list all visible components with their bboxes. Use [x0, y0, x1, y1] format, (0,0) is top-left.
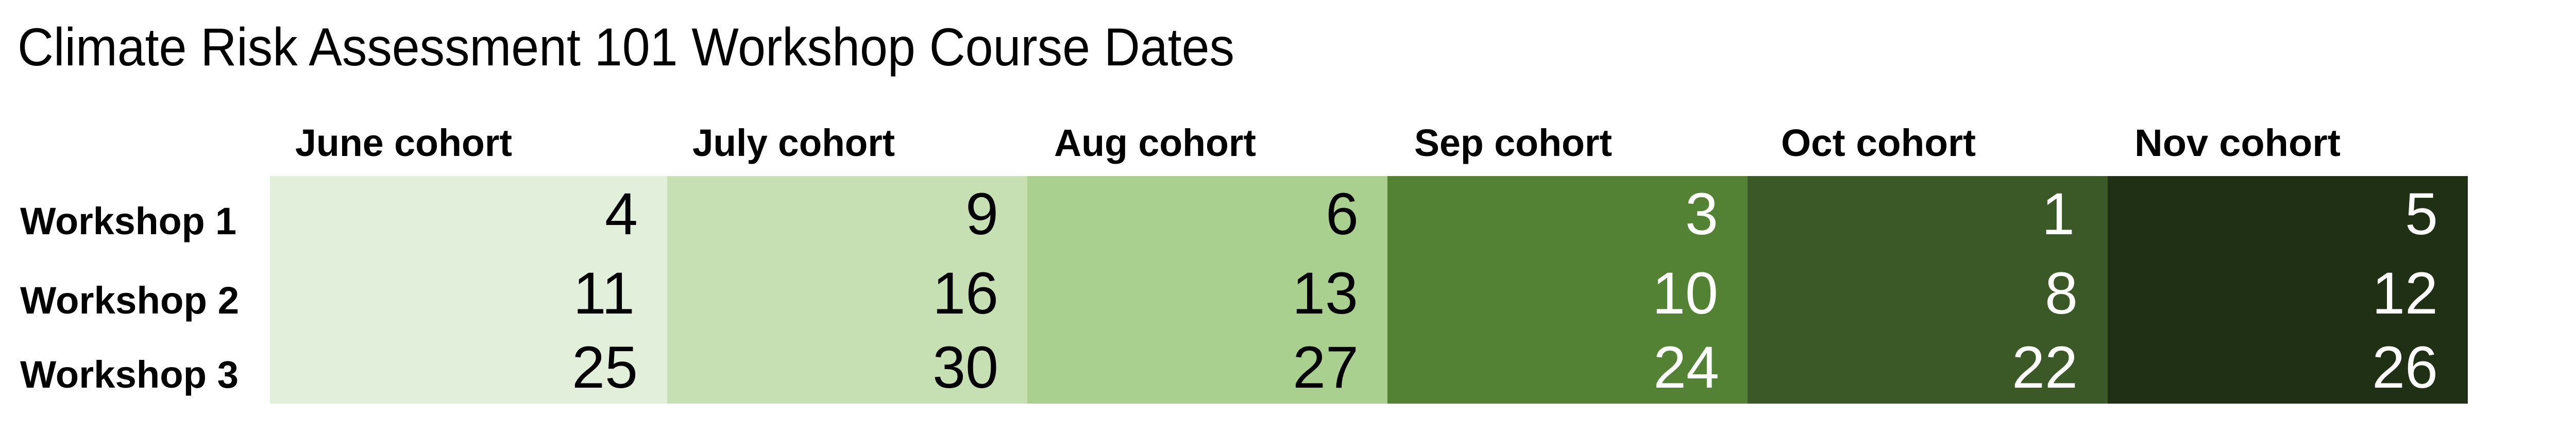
row headings: Workshop 3	[20, 353, 239, 396]
column: Nov cohort: 5	[2405, 181, 2438, 247]
column headings: Nov cohort	[2134, 121, 2341, 164]
column: Nov cohort: 26	[2372, 335, 2438, 401]
column: Sep cohort	[1387, 176, 1748, 404]
column: Oct cohort: 22	[2012, 335, 2078, 401]
column headings: Sep cohort	[1414, 121, 1612, 164]
column headings: June cohort	[295, 121, 512, 164]
column: June cohort: 11	[573, 261, 635, 326]
column: July cohort	[667, 176, 1027, 404]
column: Nov cohort	[2108, 176, 2468, 404]
column: Sep cohort: 10	[1652, 261, 1718, 326]
column: Oct cohort: 8	[2045, 261, 2078, 326]
column: Oct cohort: 1	[2042, 181, 2075, 247]
row headings: Workshop 2	[20, 279, 239, 322]
column: July cohort: 16	[933, 261, 998, 326]
column: Nov cohort: 12	[2372, 261, 2438, 326]
column: Aug cohort: 27	[1293, 335, 1359, 401]
row headings: Workshop 1	[20, 200, 236, 242]
column: Aug cohort: 13	[1292, 261, 1358, 326]
column: June cohort: 4	[605, 181, 638, 247]
row headings	[20, 200, 239, 396]
column: Aug cohort: 6	[1326, 181, 1359, 247]
column: July cohort: 30	[933, 335, 998, 401]
column: June cohort	[270, 176, 667, 404]
column headings: Oct cohort	[1781, 121, 1976, 164]
column headings: Aug cohort	[1054, 121, 1256, 164]
title: Climate Risk Assessment 101 Workshop Course Dates	[18, 18, 1234, 77]
column: Oct cohort	[1748, 176, 2108, 404]
column: Sep cohort: 3	[1685, 181, 1718, 247]
column headings: July cohort	[692, 121, 895, 164]
column: July cohort: 9	[965, 181, 998, 247]
column headings	[295, 121, 2341, 164]
column: Sep cohort: 24	[1653, 335, 1719, 401]
column: Aug cohort	[1027, 176, 1387, 404]
column: June cohort: 25	[572, 335, 638, 401]
